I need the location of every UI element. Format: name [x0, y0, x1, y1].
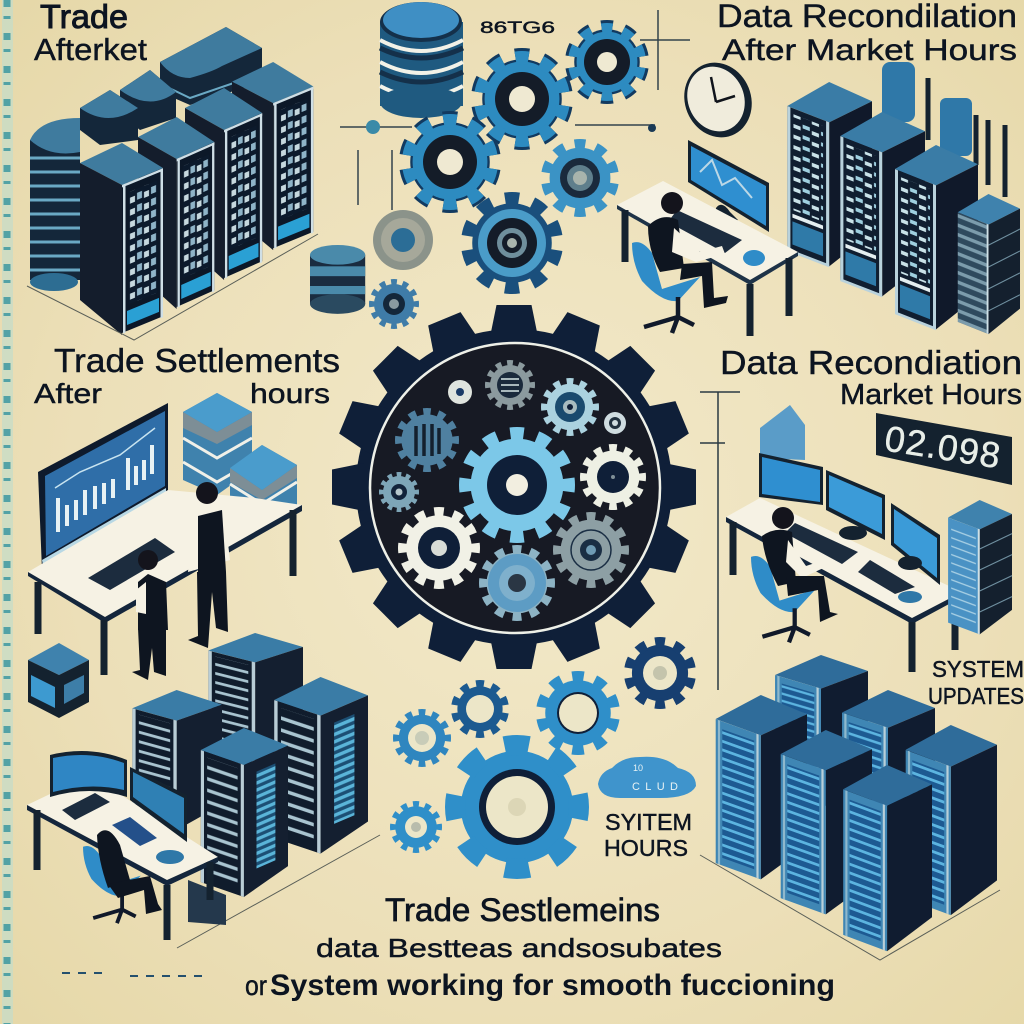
server 2 [840, 112, 925, 297]
title: middle-left: hours [250, 378, 330, 409]
gear 1 [478, 55, 566, 143]
title: middle-right [720, 344, 1022, 411]
inner gear: small left [382, 475, 416, 509]
inner gear: small top [448, 380, 472, 404]
workstation: middle-left [28, 393, 302, 680]
title: middle-left [34, 342, 340, 409]
digital clock display: 02.098 [882, 418, 1003, 476]
keyboard [88, 538, 175, 590]
server B [138, 117, 214, 309]
front server 3 [843, 765, 932, 951]
server A [80, 143, 163, 335]
person [97, 830, 162, 914]
front server 1 [716, 695, 807, 879]
title: top-right: After Market Hours [722, 34, 1017, 67]
title: middle-left: After [34, 378, 102, 409]
workstation: middle-right [726, 453, 1012, 672]
title: middle-right: Data Recondiation [720, 344, 1022, 381]
server drums [183, 393, 297, 520]
server C [185, 88, 262, 280]
server right [274, 677, 368, 854]
system hours label: SYITEM [605, 809, 692, 835]
system hours label: HOURS [604, 835, 688, 861]
clock [673, 52, 763, 148]
title: middle-right: Market Hours [840, 379, 1022, 411]
server centre [201, 728, 288, 897]
small top label: 86TG6 [480, 18, 555, 37]
workstation: top right [617, 140, 798, 336]
gear upper right [542, 677, 614, 749]
server 1 [787, 82, 872, 267]
bottom marks [62, 973, 210, 976]
person [762, 507, 838, 622]
gears: top cluster [372, 26, 643, 325]
main gear [332, 305, 696, 669]
keyboards [62, 793, 184, 864]
small database cylinder [310, 245, 365, 314]
database stack top [380, 2, 463, 118]
panel: bottom-left servers [132, 633, 368, 897]
large monitor [38, 403, 168, 570]
keyboards [785, 523, 922, 603]
chair [83, 846, 141, 923]
keyboard and mouse pad [668, 210, 765, 266]
title: top-left: Afterket [34, 32, 147, 67]
cloud badge [598, 757, 696, 798]
desk [726, 498, 962, 672]
server left [132, 690, 222, 830]
back server [208, 633, 303, 767]
monitors [759, 453, 940, 585]
gears: bottom cluster [394, 642, 691, 869]
gear 2 [571, 26, 643, 98]
inner gear: cyan centre [467, 435, 567, 535]
gear lower left [394, 805, 438, 849]
small server box [28, 643, 89, 718]
gear large [455, 745, 579, 869]
crate [188, 880, 226, 925]
desk [617, 181, 798, 336]
inner gear: white right [585, 449, 641, 505]
inner gear: tiny right [604, 412, 626, 434]
cloud badge: 10 [633, 763, 643, 773]
inner gear: blue bottom [484, 550, 550, 616]
server 3 [895, 145, 978, 330]
desk [28, 490, 302, 675]
server D [232, 62, 313, 250]
back server 3 [906, 725, 997, 915]
rack items [882, 62, 1005, 197]
gear 7 [372, 282, 416, 326]
front server 2 [781, 730, 872, 914]
server 4 [958, 194, 1020, 334]
monitor [688, 140, 769, 232]
system updates label [928, 656, 1024, 709]
left edge strip [2, 0, 13, 1024]
back server 1 [775, 655, 868, 809]
panel: top-left servers [30, 27, 313, 335]
gear 3 [406, 118, 494, 206]
monitors [50, 751, 187, 842]
system updates label: SYSTEM [932, 656, 1024, 682]
inner gear: light blue top right [545, 382, 595, 432]
gear 4 [546, 144, 614, 212]
title: top-left [34, 0, 147, 67]
inner gear: white lower left [404, 513, 474, 583]
gear 5 [468, 199, 556, 287]
small wall box [700, 392, 805, 690]
title: top-right [717, 0, 1017, 67]
caption line: data Bestteas andsosubates [316, 933, 722, 963]
panel: top-right servers [787, 62, 1020, 334]
panel: bottom-right servers [716, 655, 997, 951]
connector lines [340, 10, 690, 210]
inner gear: striped top [488, 364, 532, 406]
server [948, 500, 1012, 634]
gear 6 [373, 210, 433, 270]
chair [751, 556, 816, 642]
back racks [80, 27, 262, 145]
person [648, 192, 728, 308]
gear far right [629, 642, 691, 704]
desk [27, 775, 218, 940]
floor lines [27, 234, 1000, 960]
caption bottom line: System working for smooth fuccioning [270, 969, 835, 1002]
inner gear: grey lower right [558, 517, 624, 583]
chair [632, 242, 700, 333]
cylinder stack [30, 118, 80, 291]
back server 2 [842, 690, 935, 863]
gear left [397, 713, 447, 763]
inner gear: blue left [399, 412, 455, 468]
cloud badge: CLUD [632, 781, 678, 793]
workstation: bottom-left [27, 751, 226, 940]
caption bottom line: or [245, 970, 267, 1001]
person standing left [132, 550, 168, 680]
caption heading: Trade Sestlemeins [385, 892, 660, 928]
title: middle-left: Trade Settlements [54, 342, 340, 379]
system hours label [604, 809, 692, 861]
person standing right [188, 482, 230, 648]
gear mid [455, 684, 505, 734]
